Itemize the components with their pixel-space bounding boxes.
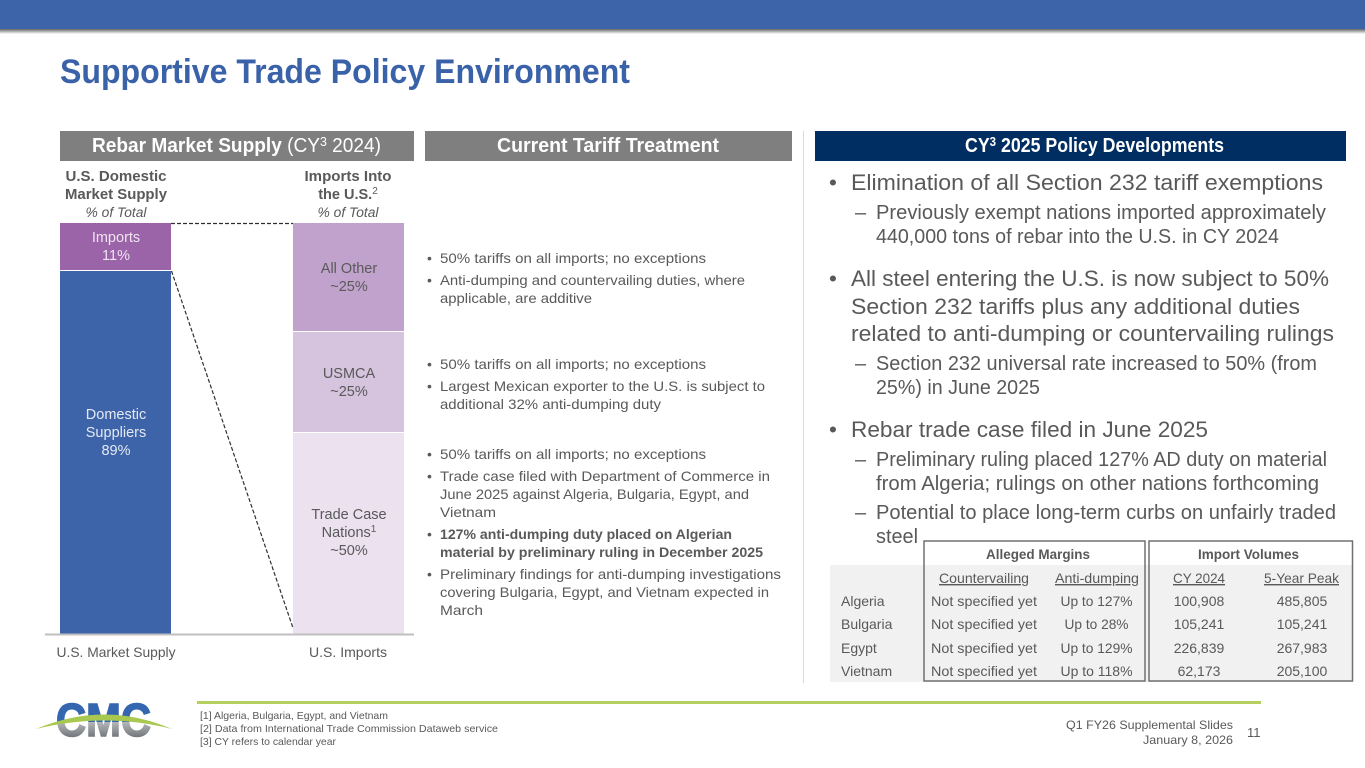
table row: Vietnam: Vietnam (841, 663, 892, 679)
text block: all other treatment: 50% tariffs on all imports; no exceptions (440, 250, 706, 266)
connector lines (171, 224, 293, 628)
footer source note: January 8, 2026 (1143, 733, 1233, 747)
footnotes (200, 710, 498, 748)
table row: Egypt: Up to 129% (1060, 640, 1132, 656)
text block: trade case treatment: 50% tariffs on all imports; no exceptions (440, 446, 706, 462)
table row: Algeria: Algeria (841, 593, 885, 609)
column heading: imports into the U.S.: the U.S. (318, 187, 372, 203)
table row: Egypt (841, 640, 1328, 656)
heading: CY 2025 policy developments: 3 (990, 134, 996, 149)
column heading: imports into the U.S.: % of Total (318, 205, 380, 220)
text block: all other treatment (427, 250, 745, 306)
table row: Vietnam: 205,100 (1277, 663, 1328, 679)
bullet: elimination of exemptions: – (855, 202, 867, 224)
text block: all other treatment: • (427, 250, 432, 266)
bar segment: USMCA: ~25% (330, 384, 368, 400)
bullet: rebar trade case: Potential to place long-term curbs on unfairly traded (876, 502, 1336, 524)
table row: Algeria: 100,908 (1174, 593, 1225, 609)
bullet: rebar trade case: Preliminary ruling placed 127% AD duty on material (876, 449, 1327, 471)
table row: Egypt: 226,839 (1174, 640, 1225, 656)
text block: all other treatment: • (427, 272, 432, 288)
column heading: imports into the U.S.: 2 (372, 186, 378, 197)
bullet: all steel subject to tariffs: Section 232 tariffs plus any additional duties (851, 294, 1300, 319)
panel: current tariff treatment (425, 131, 792, 618)
text block: USMCA treatment (427, 356, 765, 412)
axis label: U.S. imports: U.S. Imports (309, 644, 387, 660)
heading: current tariff treatment (425, 131, 792, 161)
text block: trade case treatment: June 2025 against Algeria, Bulgaria, Egypt, and (440, 486, 749, 502)
text block: all other treatment: applicable, are additive (440, 290, 592, 306)
bullet: all steel subject to tariffs: Section 232 universal rate increased to 50% (from (876, 353, 1317, 375)
footer source note: Q1 FY26 Supplemental Slides (1066, 718, 1233, 732)
bar segment: all other: ~25% (330, 279, 368, 295)
page number: 11 (1247, 725, 1260, 740)
text block: trade case treatment: • (427, 446, 432, 462)
text block: trade case treatment: • (427, 526, 432, 542)
bullet: rebar trade case: from Algeria; rulings on other nations forthcoming (876, 473, 1319, 495)
table row: Vietnam: 62,173 (1178, 663, 1221, 679)
footer rule (197, 701, 1261, 704)
column heading: U.S. domestic market supply (65, 169, 167, 220)
bar segment: domestic suppliers 89%: Suppliers (86, 425, 146, 441)
panel: rebar market supply (45, 131, 414, 660)
text block: trade case treatment: Vietnam (440, 504, 496, 520)
table column headers: Anti-dumping (1055, 570, 1139, 586)
table group header: import volumes: Import Volumes (1198, 546, 1299, 562)
table row: Vietnam (841, 663, 1328, 679)
bullet: rebar trade case: Rebar trade case filed in June 2025 (851, 417, 1208, 442)
bar segment: imports 11%: Imports (92, 230, 140, 246)
text block: all other treatment: Anti-dumping and countervailing duties, where (440, 272, 745, 288)
heading: current tariff treatment: Current Tariff Treatment (497, 135, 719, 157)
table column headers: 5-Year Peak (1264, 570, 1340, 586)
text block: trade case treatment (427, 446, 781, 618)
table row: Bulgaria: Up to 28% (1064, 616, 1128, 632)
bar segment: trade case nations: 1 (371, 524, 377, 535)
table column headers: Countervailing (939, 570, 1029, 586)
table row: Algeria: 485,805 (1277, 593, 1328, 609)
table row: Egypt: Egypt (841, 640, 877, 656)
bullet: all steel subject to tariffs: 25%) in June 2025 (876, 377, 1040, 399)
text block: trade case treatment: • (427, 566, 432, 582)
table row: Vietnam: Up to 118% (1060, 663, 1132, 679)
bullet: rebar trade case (829, 417, 1336, 548)
column heading: U.S. domestic market supply: Market Supply (65, 187, 167, 203)
table row: Bulgaria: Not specified yet (931, 616, 1037, 632)
text block: trade case treatment: Trade case filed with Department of Commerce in (440, 468, 770, 484)
heading: CY 2025 policy developments: 2025 Policy Developments (996, 135, 1224, 157)
heading: rebar market supply: 2024) (327, 135, 381, 157)
bullet: all steel subject to tariffs: All steel entering the U.S. is now subject to 50% (851, 266, 1329, 291)
heading: rebar market supply: Rebar Market Supply (CY (92, 135, 322, 157)
bullet: elimination of exemptions (829, 170, 1326, 248)
table row: Egypt: 267,983 (1277, 640, 1328, 656)
logo: CMC: CMC (56, 694, 151, 746)
heading: rebar market supply: 3 (320, 134, 327, 149)
column heading: imports into the U.S.: Imports Into (304, 169, 392, 185)
bar segment: trade case nations: Nations (322, 525, 371, 541)
bar segment: domestic suppliers 89%: 89% (101, 443, 131, 459)
bar segment: trade case nations: ~50% (330, 543, 368, 559)
text block: USMCA treatment: • (427, 378, 432, 394)
bullet: all steel subject to tariffs (829, 266, 1334, 399)
bar segment: USMCA: USMCA (323, 366, 376, 382)
bullet: all steel subject to tariffs: related to anti-dumping or countervailing rulings (851, 321, 1334, 346)
title: Supportive Trade Policy Environment (60, 53, 630, 91)
axis label: U.S. market supply: U.S. Market Supply (56, 644, 176, 660)
bar segment: domestic suppliers 89%: Domestic (86, 407, 146, 423)
bullet: rebar trade case: – (855, 502, 867, 524)
table row: Bulgaria (841, 616, 1328, 632)
table: alleged margins and import volumes (830, 541, 1353, 682)
text block: trade case treatment: 127% anti-dumping duty placed on Algerian (440, 526, 732, 542)
bullet: elimination of exemptions: Previously exempt nations imported approximately (876, 202, 1326, 224)
table row: Egypt: Not specified yet (931, 640, 1037, 656)
text block: trade case treatment: covering Bulgaria, Egypt, and Vietnam expected in (440, 584, 769, 600)
bullet: rebar trade case: steel (876, 526, 918, 548)
text block: trade case treatment: • (427, 468, 432, 484)
column heading: U.S. domestic market supply: % of Total (86, 205, 148, 220)
column heading: imports into the U.S. (304, 169, 392, 220)
text block: USMCA treatment: additional 32% anti-dumping duty (440, 396, 661, 412)
bullet: all steel subject to tariffs: – (855, 353, 867, 375)
bar segment: domestic suppliers 89% (60, 271, 171, 634)
bullet: rebar trade case: • (829, 417, 837, 442)
bullet: elimination of exemptions: Elimination of all Section 232 tariff exemptions (851, 170, 1323, 195)
table row: Vietnam: Not specified yet (931, 663, 1037, 679)
bullet: elimination of exemptions: 440,000 tons of rebar into the U.S. in CY 2024 (876, 226, 1279, 248)
bar segment: imports 11% (60, 223, 171, 270)
footnotes: [3] CY refers to calendar year (200, 736, 336, 748)
table row: Bulgaria: Bulgaria (841, 616, 893, 632)
heading: CY 2025 policy developments: CY (965, 135, 993, 157)
bar segment: USMCA (293, 332, 404, 432)
column heading: U.S. domestic market supply: U.S. Domestic (66, 169, 166, 185)
bullet: elimination of exemptions: • (829, 170, 837, 195)
table row: Bulgaria: 105,241 (1277, 616, 1328, 632)
table row: Bulgaria: 105,241 (1174, 616, 1225, 632)
table row: Algeria (841, 593, 1328, 609)
table column headers (939, 570, 1340, 586)
text block: trade case treatment: March (440, 602, 483, 618)
footer source note (1066, 718, 1233, 747)
bullet: rebar trade case: – (855, 449, 867, 471)
footnotes: [1] Algeria, Bulgaria, Egypt, and Vietnam (200, 710, 388, 722)
top banner (0, 0, 1365, 34)
table row: Algeria: Up to 127% (1060, 593, 1132, 609)
table row: Algeria: Not specified yet (931, 593, 1037, 609)
bar segment: trade case nations (293, 433, 404, 634)
text block: USMCA treatment: 50% tariffs on all imports; no exceptions (440, 356, 706, 372)
heading: rebar market supply (60, 131, 414, 161)
table group header: alleged margins: Alleged Margins (986, 546, 1090, 562)
table column headers: CY 2024 (1173, 570, 1225, 586)
heading: CY 2025 policy developments (815, 131, 1346, 161)
bar segment: trade case nations: Trade Case (311, 507, 387, 523)
bullet: all steel subject to tariffs: • (829, 266, 837, 291)
bar segment: all other: All Other (321, 261, 377, 277)
bar segment: imports 11%: 11% (102, 248, 130, 264)
text block: trade case treatment: Preliminary findings for anti-dumping investigations (440, 566, 781, 582)
text block: USMCA treatment: • (427, 356, 432, 372)
text block: trade case treatment: material by preliminary ruling in December 2025 (440, 544, 763, 560)
panel: CY 2025 policy developments (815, 131, 1353, 682)
text block: USMCA treatment: Largest Mexican exporter to the U.S. is subject to (440, 378, 765, 394)
bar segment: all other (293, 223, 404, 331)
footnotes: [2] Data from International Trade Commission Dataweb service (200, 723, 498, 735)
